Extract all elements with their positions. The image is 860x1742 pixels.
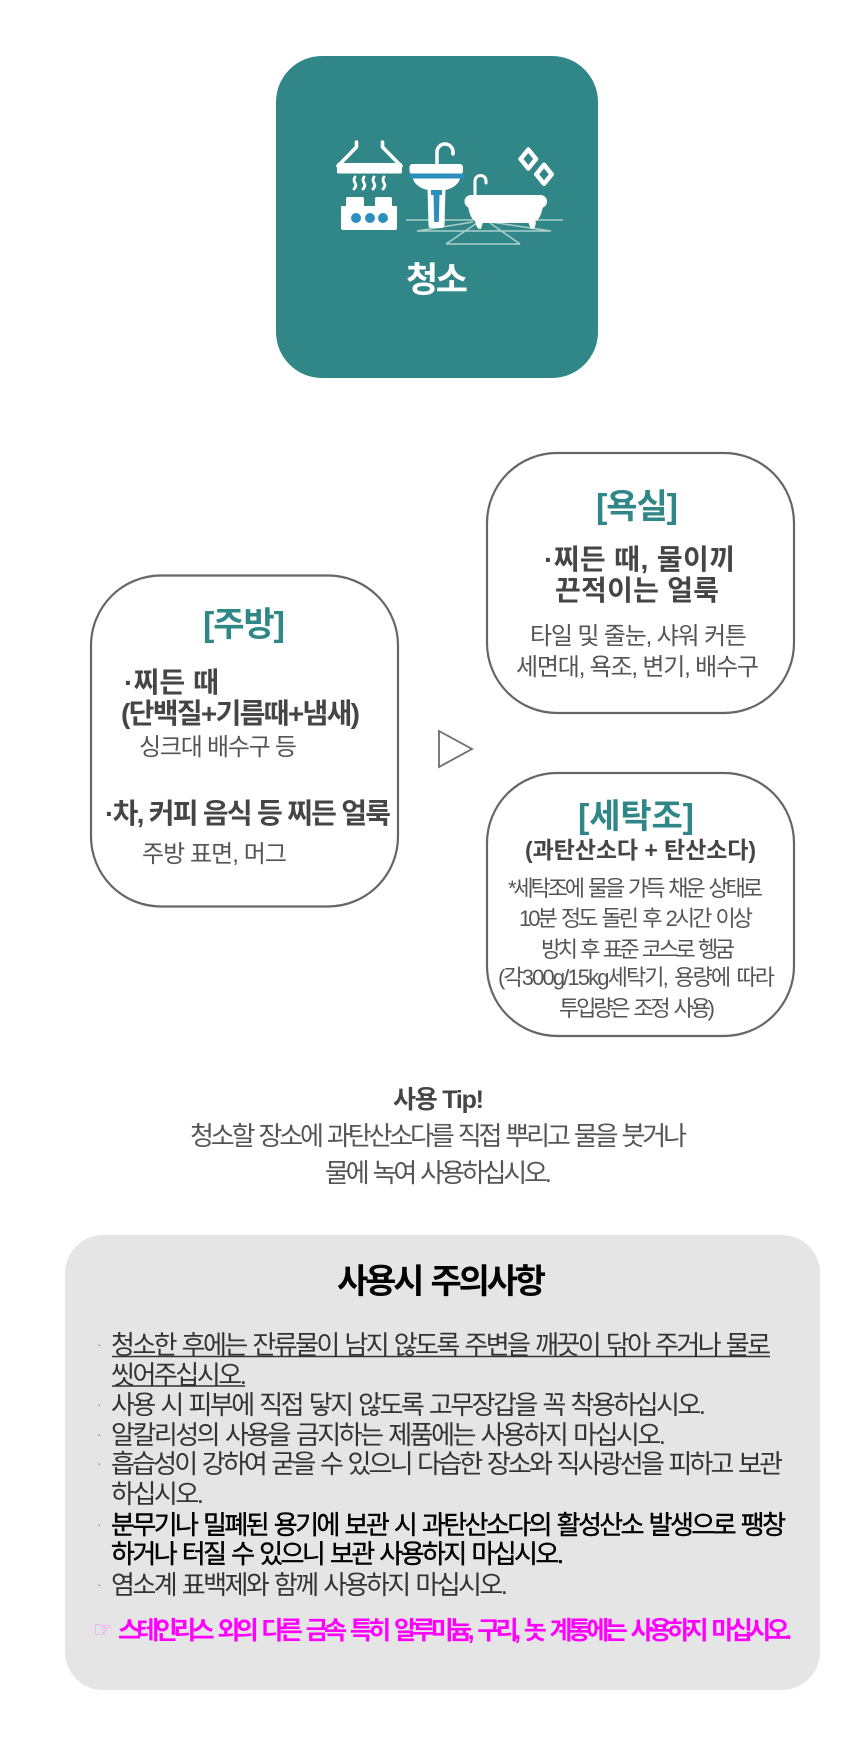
bathroom stains: 끈적이는 얼룩 xyxy=(555,575,719,606)
kitchen heading: [주방] xyxy=(203,606,285,644)
bathroom stains xyxy=(544,544,735,606)
washer instructions: (각300g/15kg세탁기, 용량에 따라 xyxy=(498,965,775,990)
precaution list: 하거나 터질 수 있으니 보관 사용하지 마십시오. xyxy=(111,1539,564,1569)
card title: 청소 xyxy=(406,261,468,300)
precaution list: · xyxy=(97,1396,102,1412)
panel: kitchen xyxy=(91,576,398,906)
precaution list: · xyxy=(97,1576,102,1592)
precaution list: 염소계 표백제와 함께 사용하지 마십시오. xyxy=(111,1570,508,1600)
precaution list: · xyxy=(97,1516,102,1532)
bathroom stains: ·찌든 때, 물이끼 xyxy=(544,544,735,575)
icon: pointing hand: ☞ xyxy=(93,1618,113,1643)
precaution list: 청소한 후에는 잔류물이 남지 않도록 주변을 깨끗이 닦아 주거나 물로 xyxy=(111,1330,771,1360)
precaution list: · xyxy=(97,1426,102,1442)
kitchen item two: ·차, 커피 음식 등 찌든 얼룩 xyxy=(105,798,391,829)
icon: floor tile lines xyxy=(406,220,563,244)
kitchen item two: 주방 표면, 머그 xyxy=(142,841,287,868)
kitchen item one: ·찌든 때 xyxy=(124,667,219,698)
precaution list: 흡습성이 강하여 굳을 수 있으니 다습한 장소와 직사광선을 피하고 보관 xyxy=(111,1449,783,1479)
kitchen item one xyxy=(121,667,360,761)
precaution list: · xyxy=(97,1455,102,1471)
icon: kitchen hood and stove xyxy=(337,142,402,230)
bathroom surfaces xyxy=(516,623,759,681)
bathroom surfaces: 타일 및 줄눈, 샤워 커튼 xyxy=(530,623,747,650)
usage tip: 사용 Tip! xyxy=(393,1086,484,1114)
washer instructions: 방치 후 표준 코스로 헹굼 xyxy=(541,937,735,962)
usage tip xyxy=(190,1086,687,1188)
kitchen item one: 싱크대 배수구 등 xyxy=(139,734,297,761)
washer heading: [세탁조] xyxy=(578,798,694,836)
bathroom surfaces: 세면대, 욕조, 변기, 배수구 xyxy=(516,654,759,681)
icon: bathtub xyxy=(464,176,547,229)
panel: precautions xyxy=(65,1235,820,1690)
arrow xyxy=(439,731,472,767)
washer mix: (과탄산소다 + 탄산소다) xyxy=(525,837,756,863)
precaution list: 사용 시 피부에 직접 닿지 않도록 고무장갑을 꼭 착용하십시오. xyxy=(111,1390,706,1420)
bathroom heading: [욕실] xyxy=(596,488,678,526)
precautions heading: 사용시 주의사항 xyxy=(337,1263,546,1301)
kitchen item two xyxy=(105,798,391,868)
panel: washing machine tub xyxy=(487,773,794,1036)
washer instructions: 투입량은 조정 사용) xyxy=(559,996,715,1021)
precaution list: 알칼리성의 사용을 금지하는 제품에는 사용하지 마십시오. xyxy=(111,1420,666,1450)
usage tip: 청소할 장소에 과탄산소다를 직접 뿌리고 물을 붓거나 xyxy=(190,1121,687,1151)
precaution list xyxy=(97,1330,786,1600)
icon: sink xyxy=(409,144,464,228)
panel: cleaning category card xyxy=(276,56,598,378)
washer instructions: *세탁조에 물을 가득 채운 상태로 xyxy=(508,876,763,901)
panel: bathroom xyxy=(487,453,794,713)
usage tip: 물에 녹여 사용하십시오. xyxy=(325,1158,552,1188)
washer instructions xyxy=(498,876,775,1021)
washer instructions: 10분 정도 돌린 후 2시간 이상 xyxy=(519,906,753,931)
kitchen item one: (단백질+기름때+냄새) xyxy=(121,698,360,729)
precaution list: · xyxy=(97,1336,102,1352)
icon: soap diamonds xyxy=(521,150,552,184)
precaution list: 씻어주십시오. xyxy=(111,1360,247,1390)
warning line: 스테인리스 외의 다른 금속 특히 알루미늄, 구리, 놋 계통에는 사용하지 마십시오. xyxy=(118,1617,792,1645)
precaution list: 하십시오. xyxy=(111,1479,204,1509)
precaution list: 분무기나 밀폐된 용기에 보관 시 과탄산소다의 활성산소 발생으로 팽창 xyxy=(111,1510,786,1540)
